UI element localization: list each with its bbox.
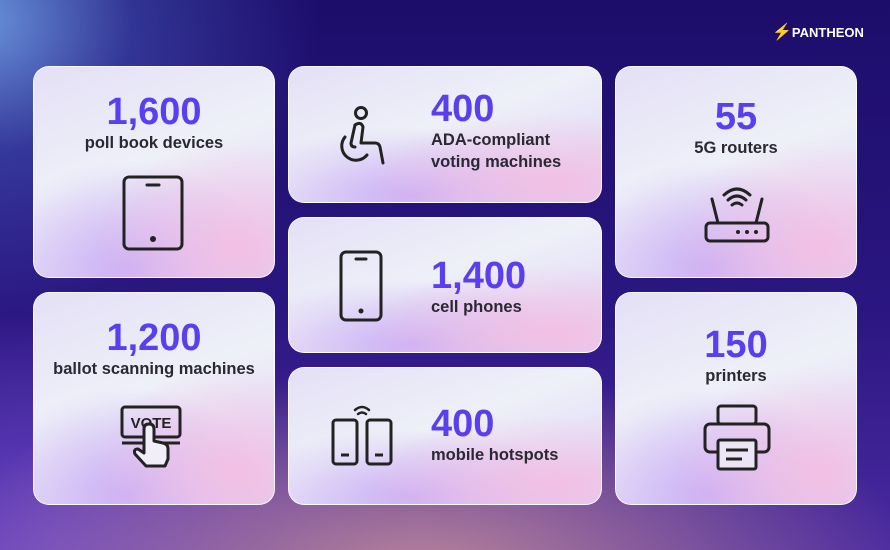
card: ADA-compliant voting machines: voting machines xyxy=(431,153,561,171)
card: cell phones: 1,400 xyxy=(431,255,526,297)
card: ADA-compliant voting machines xyxy=(288,66,602,203)
icon: wheelchair xyxy=(340,106,384,164)
card: ballot scanning machines: ballot scanning machines xyxy=(53,360,255,378)
card: printers: printers xyxy=(705,367,767,385)
card: mobile hotspots xyxy=(288,367,602,505)
card: cell phones xyxy=(288,217,602,353)
icon: vote: VOTE xyxy=(131,415,171,432)
card: printers: 150 xyxy=(704,324,768,366)
icon: vote xyxy=(120,406,182,468)
card: 5G routers: 55 xyxy=(715,96,757,138)
card: ballot scanning machines: 1,200 xyxy=(106,317,202,359)
card: printers xyxy=(615,292,857,505)
card: poll book devices: poll book devices xyxy=(85,134,223,152)
card: mobile hotspots: 400 xyxy=(431,403,494,445)
card: ADA-compliant voting machines: ADA-compliant xyxy=(431,131,550,149)
icon: tablet xyxy=(122,176,184,250)
card: poll book devices xyxy=(33,66,275,278)
icon: printer xyxy=(704,404,770,470)
card: cell phones: cell phones xyxy=(431,298,522,316)
card: ADA-compliant voting machines: 400 xyxy=(431,88,494,130)
card: 5G routers xyxy=(615,66,857,278)
icon: hotspot phones xyxy=(332,406,392,466)
logo: ⚡PANTHEON xyxy=(772,24,864,41)
card: poll book devices: 1,600 xyxy=(106,91,202,133)
card: ballot scanning machines xyxy=(33,292,275,505)
icon: phone xyxy=(340,250,382,322)
card: mobile hotspots: mobile hotspots xyxy=(431,446,558,464)
icon: router xyxy=(704,187,770,242)
card: 5G routers: 5G routers xyxy=(694,139,778,157)
